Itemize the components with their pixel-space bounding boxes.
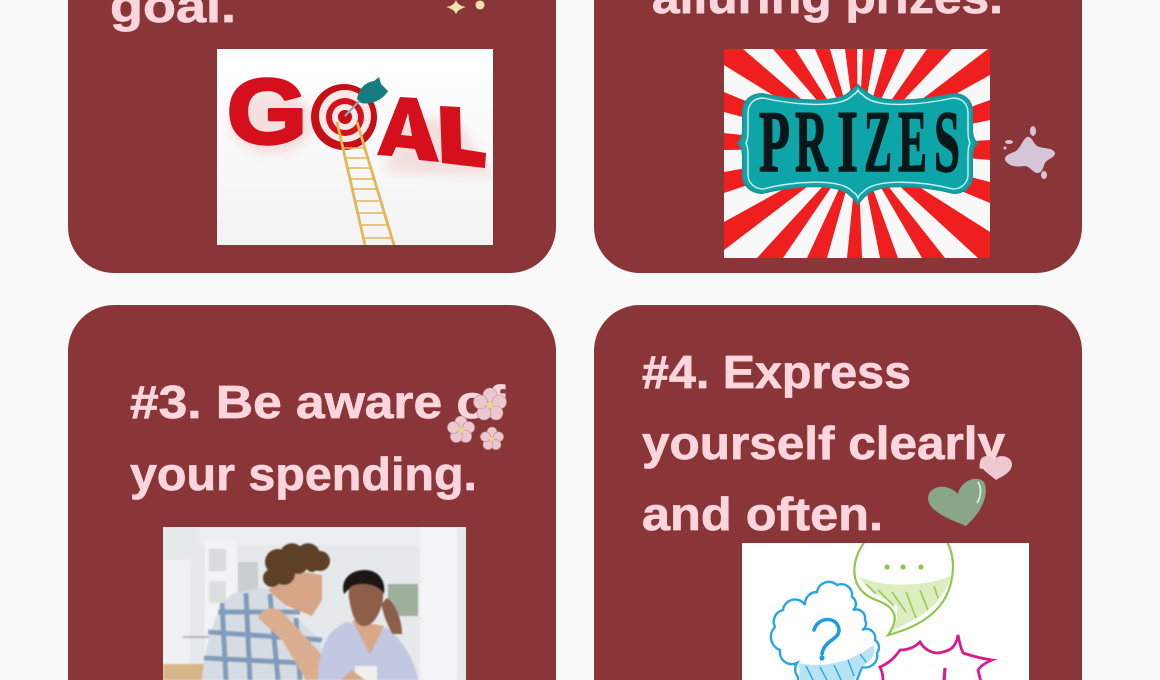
sunburst rays (724, 49, 990, 258)
ladder (337, 122, 394, 245)
panel: spending (68, 305, 556, 680)
image: goal (217, 49, 494, 245)
plaque (738, 85, 977, 204)
heading: spending: your spending. (130, 448, 477, 500)
green speech bubble (854, 540, 953, 635)
hair (263, 543, 330, 587)
word: PRIZES: R (795, 94, 829, 191)
heading: express: and often. (642, 488, 883, 540)
word: PRIZES: I (837, 94, 858, 191)
arrow (345, 77, 388, 116)
panel: prizes (594, 0, 1082, 273)
image: couple (163, 527, 466, 680)
word: PRIZES: Z (864, 94, 892, 191)
man (202, 543, 330, 680)
word: G: G (227, 61, 307, 163)
word: PRIZES: E (898, 94, 927, 191)
heading: express: yourself clearly (642, 417, 1005, 469)
word: AL (377, 97, 486, 168)
blue thought cloud (771, 582, 879, 680)
panel: express (594, 305, 1082, 680)
word: PRIZES: P (759, 94, 790, 191)
word: PRIZES: S (934, 94, 960, 191)
heading: spending: #3. Be aware of (130, 376, 506, 428)
icon: paint splat (1004, 126, 1055, 179)
icon: hearts (928, 456, 1012, 526)
icon: sparkle (446, 0, 484, 14)
image: prizes (724, 49, 990, 258)
heading: express (642, 346, 1005, 540)
icon: flowers (447, 388, 506, 450)
word: PRIZES (759, 112, 958, 173)
pink burst (880, 635, 992, 680)
panel: goal (68, 0, 556, 273)
image: speech bubbles (742, 540, 1029, 680)
woman (318, 570, 418, 680)
heading: spending (130, 376, 506, 500)
target (311, 84, 377, 150)
heading: express: #4. Express (642, 346, 911, 398)
